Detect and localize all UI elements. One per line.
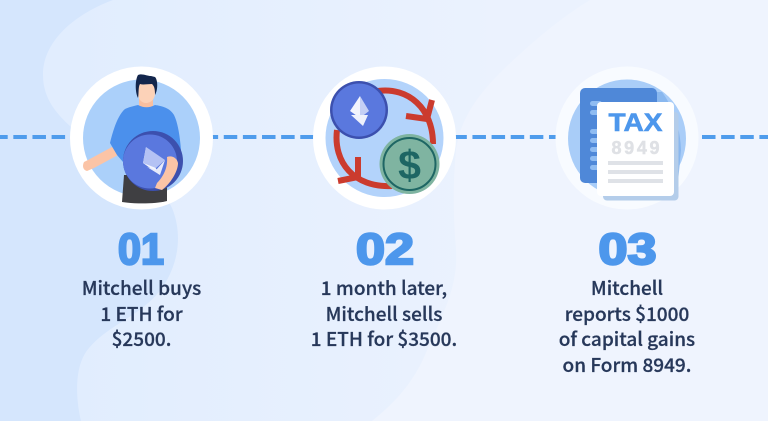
form paper xyxy=(597,102,674,196)
text: step 2 xyxy=(311,274,457,352)
number 02: 02 xyxy=(356,225,414,274)
text: step 1 xyxy=(82,274,201,352)
text: step 2: 1 ETH for $3500. xyxy=(311,325,457,352)
hair xyxy=(136,74,157,98)
back folder xyxy=(656,92,681,182)
text: step 3: reports $1000 xyxy=(565,300,689,327)
torso xyxy=(110,105,182,170)
text: step 1: Mitchell buys xyxy=(82,274,201,301)
coin xyxy=(123,131,183,191)
hand xyxy=(155,156,178,190)
step 3 icon: tax form xyxy=(556,66,698,210)
text: step 3: of capital gains xyxy=(559,325,695,352)
binder tabs xyxy=(590,101,602,170)
step 2 icon: ETH to dollar exchange: $ xyxy=(398,142,421,188)
text: step 3: Mitchell xyxy=(591,274,663,301)
form lines xyxy=(608,161,663,183)
text: step 3: on Form 8949. xyxy=(563,351,691,378)
number 03: 03 xyxy=(598,225,656,274)
person neck and head xyxy=(139,95,153,109)
arm left xyxy=(83,147,120,171)
text: step 1: 1 ETH for xyxy=(100,300,183,327)
ETH coin xyxy=(330,81,388,139)
number 01: 01 xyxy=(118,225,164,274)
dollar coin xyxy=(380,134,440,194)
exchange arrows xyxy=(337,91,433,186)
text: step 1: $2500. xyxy=(112,325,171,352)
dashed timeline xyxy=(0,135,768,139)
form shadow xyxy=(603,112,678,200)
TAX label: TAX xyxy=(608,109,663,137)
step 1 icon: person holding ETH coin xyxy=(70,66,213,210)
text: step 2: 1 month later, xyxy=(321,274,447,301)
text: step 3 xyxy=(559,274,695,378)
step 2 icon: ETH to dollar exchange xyxy=(313,66,456,210)
person legs xyxy=(122,175,167,203)
8949 label: 8949 xyxy=(612,138,660,158)
text: step 2: Mitchell sells xyxy=(326,300,442,327)
ETH glyph xyxy=(143,147,160,175)
